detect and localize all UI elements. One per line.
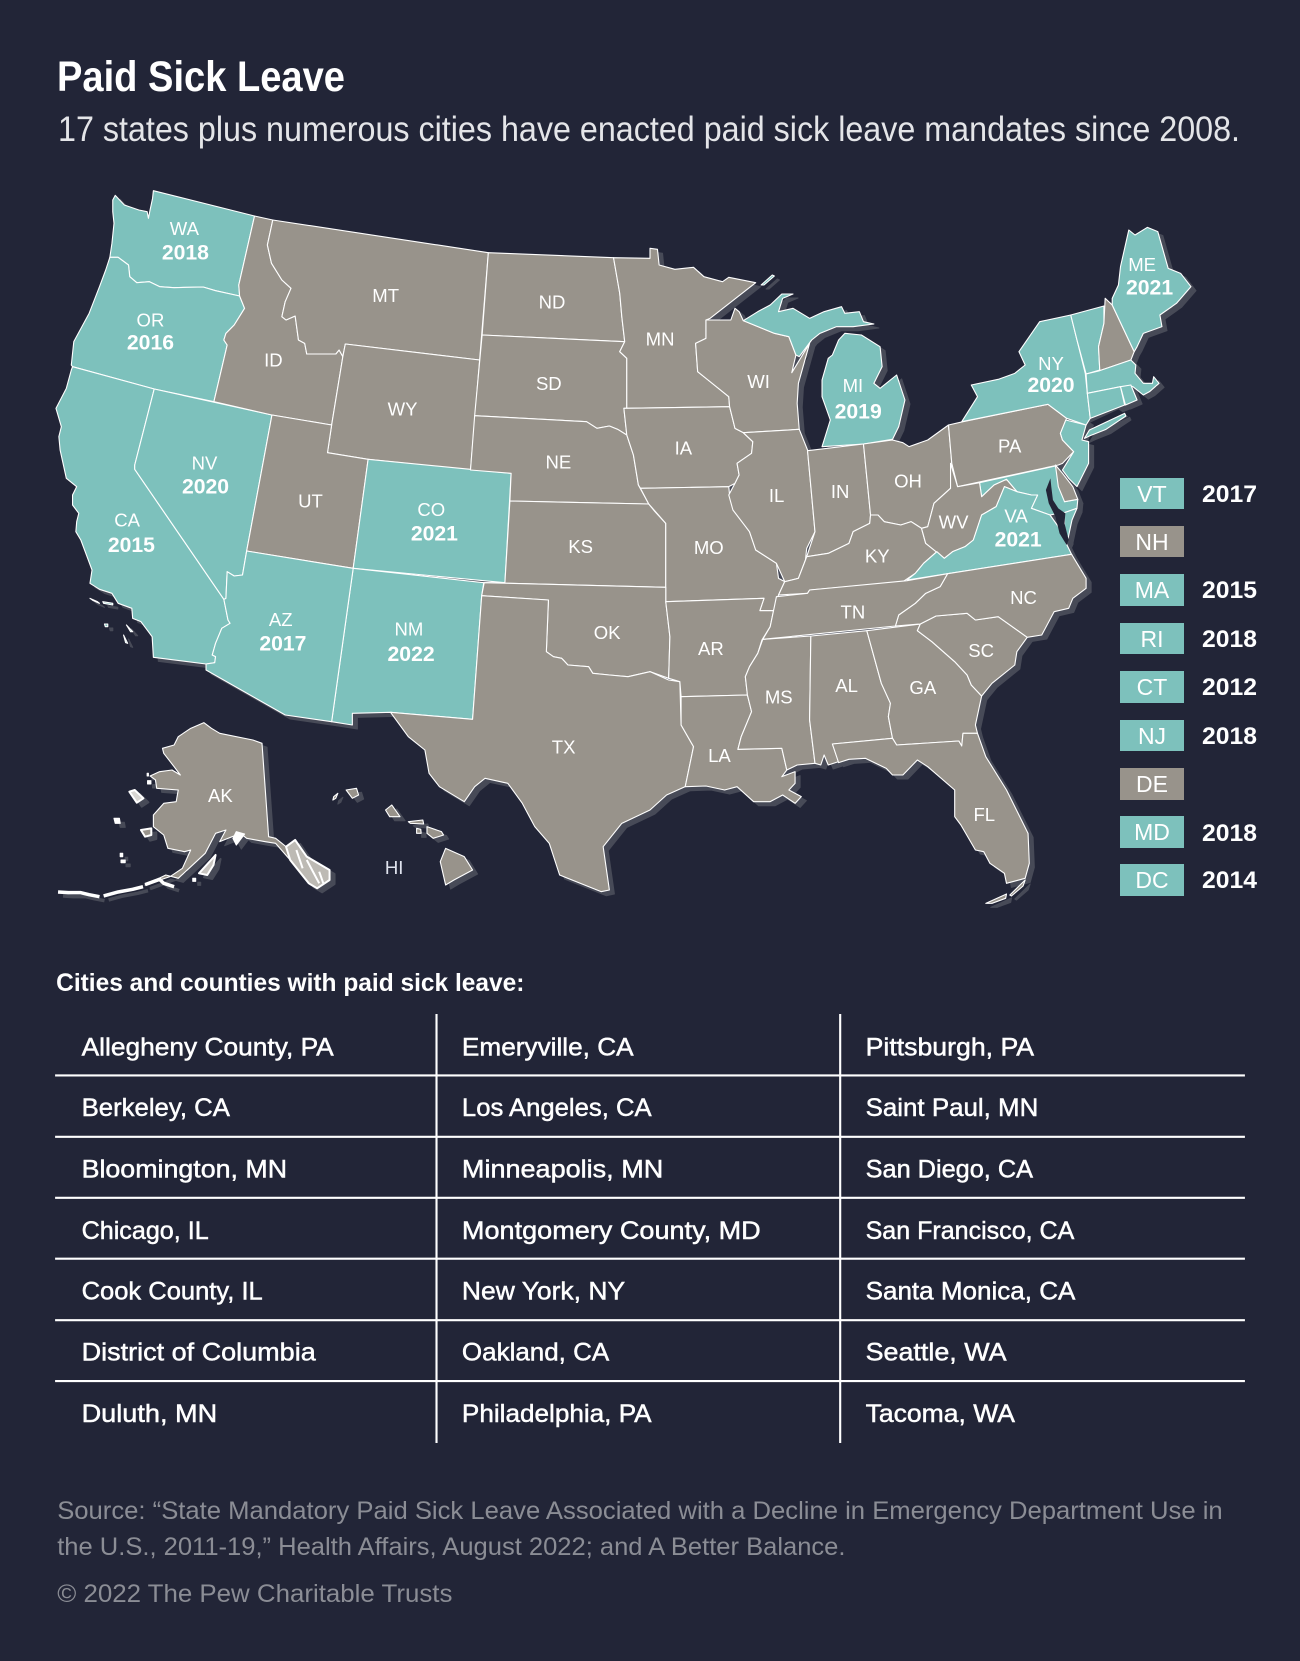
legend row: CT: 2012 (1202, 674, 1257, 701)
label: AZ: AZ (269, 609, 293, 630)
state: KY (779, 515, 937, 595)
state: NM (332, 568, 484, 725)
legend row: CT: CT (1137, 674, 1167, 700)
label: UT: UT (298, 491, 323, 512)
Alaska: small western islands (114, 773, 245, 881)
label: NM: NM (395, 619, 423, 640)
state: HI, Molokai (408, 820, 424, 824)
legend row: DC: DC (1135, 867, 1169, 893)
column 1 (82, 1034, 334, 1428)
state: MN (614, 248, 756, 408)
label: KS: KS (568, 536, 593, 557)
label: WY: WY (388, 398, 418, 419)
legend row: RI: 2018 (1202, 626, 1257, 653)
state: HI, Niihau and Kauai (333, 788, 359, 800)
legend: small northeastern states (1120, 478, 1258, 896)
state: MI lower peninsula (822, 333, 905, 447)
column 3: Saint Paul, MN (866, 1094, 1038, 1122)
state: WV (922, 463, 1017, 558)
legend row: RI (1120, 623, 1257, 654)
column 3: Pittsburgh, PA (866, 1034, 1034, 1062)
state: IN (807, 444, 871, 557)
column 1: Cook County, IL (82, 1277, 263, 1305)
state: CT (1087, 387, 1125, 418)
legend row: NJ: 2018 (1202, 723, 1257, 750)
year: CO: 2021 (411, 522, 458, 545)
column 2: Minneapolis, MN (462, 1155, 663, 1183)
state: NC (895, 554, 1086, 637)
label: NC: NC (1010, 587, 1037, 608)
legend row: DE: DE (1136, 771, 1168, 797)
state: OH (863, 425, 952, 528)
state: CA (56, 367, 230, 664)
legend row: VT (1120, 478, 1257, 509)
Long Island (1084, 413, 1126, 438)
state: NH (1099, 298, 1134, 371)
state: MT (267, 220, 488, 360)
state: KS (484, 501, 666, 587)
table of cities and counties (55, 1014, 1245, 1443)
state: FL (832, 733, 1029, 883)
Chesapeake Bay (1046, 478, 1069, 545)
state: NV (135, 389, 272, 599)
California Channel Islands (90, 598, 133, 643)
label: CO: CO (417, 499, 445, 520)
column 3 (866, 1034, 1075, 1428)
state: CO (353, 459, 511, 583)
column 3: Tacoma, WA (866, 1400, 1015, 1428)
year: MI: 2019 (835, 401, 882, 424)
legend row: MA: MA (1135, 577, 1170, 603)
legend row: MD (1120, 816, 1257, 848)
state: MS (738, 636, 815, 770)
cities section (55, 969, 1245, 1608)
column 2: Philadelphia, PA (462, 1400, 652, 1428)
state: NJ (1060, 420, 1089, 487)
source note: the U.S., 2011-19,” Health Affairs, August 2022; and A Better Balance. (57, 1533, 845, 1561)
label: PA: PA (998, 435, 1022, 456)
legend row: VT: 2017 (1202, 481, 1257, 508)
label: ND: ND (539, 291, 565, 312)
label: FL: FL (973, 804, 995, 825)
label: OH: OH (894, 470, 922, 491)
state: OR (71, 257, 245, 402)
label: IA: IA (675, 438, 693, 459)
label: NV: NV (192, 452, 218, 473)
year: OR: 2016 (127, 332, 174, 355)
legend row: DC (1120, 864, 1258, 896)
Florida Keys (986, 894, 1007, 903)
label: WI: WI (747, 371, 770, 392)
state: UT (247, 415, 368, 568)
label: IN: IN (831, 481, 849, 502)
column 1: Allegheny County, PA (82, 1034, 334, 1062)
state: TX (390, 596, 694, 892)
state: HI, Oahu (386, 805, 400, 817)
state: TN (763, 574, 948, 639)
column 1: Duluth, MN (82, 1400, 217, 1428)
label: LA: LA (708, 745, 731, 766)
state: HI, Big Island (440, 848, 473, 885)
label: MO: MO (694, 537, 724, 558)
state: SC (917, 613, 1027, 696)
state: ND (482, 253, 625, 342)
column 2: New York, NY (462, 1277, 625, 1305)
column 3: San Francisco, CA (866, 1217, 1074, 1245)
column 1: Bloomington, MN (82, 1155, 287, 1183)
source note: Source: “State Mandatory Paid Sick Leave Associated with a Decline in Emergency Department Use in (57, 1497, 1223, 1525)
label: SD: SD (536, 373, 562, 394)
column 2: Emeryville, CA (462, 1034, 634, 1062)
label: OK: OK (594, 622, 621, 643)
state: WA (110, 191, 255, 296)
column 1: Berkeley, CA (82, 1094, 230, 1122)
state: AL (810, 631, 893, 765)
copyright: © 2022 The Pew Charitable Trusts (57, 1580, 452, 1608)
label: WA: WA (170, 218, 200, 239)
column 1: District of Columbia (82, 1339, 317, 1367)
state: MD (980, 466, 1078, 515)
legend row: NH: NH (1135, 529, 1169, 555)
label: MN: MN (646, 328, 674, 349)
state: OK (482, 583, 670, 678)
year: AZ: 2017 (259, 633, 306, 656)
label: AL: AL (835, 675, 858, 696)
source note (57, 1497, 1223, 1561)
year: NV: 2020 (182, 476, 229, 499)
Alaska: Aleutian Islands (58, 879, 174, 897)
island: Isle Royale (761, 275, 774, 285)
state: ID (214, 216, 343, 425)
state: HI, Lanai (417, 828, 421, 833)
Alaska: Nunivak Island (141, 828, 151, 837)
label: MI: MI (843, 375, 863, 396)
legend row: DE (1120, 768, 1184, 800)
column 3: San Diego, CA (866, 1155, 1033, 1183)
state: IL (729, 429, 815, 582)
legend row: NH (1120, 526, 1184, 557)
year: WA: 2018 (162, 242, 209, 265)
state: NY (962, 315, 1090, 425)
state: MA (1086, 360, 1159, 395)
legend row: NJ (1120, 720, 1257, 751)
legend row: MA: 2015 (1202, 577, 1257, 604)
label: VA: VA (1004, 505, 1028, 526)
state: VT (1071, 306, 1104, 374)
state: VA (907, 487, 1072, 580)
column 3: Santa Monica, CA (866, 1277, 1075, 1305)
state: HI, Maui (427, 827, 444, 838)
legend row: CT (1120, 671, 1257, 703)
state: PA (948, 404, 1074, 487)
state: MI upper peninsula (743, 294, 874, 357)
state: ME (1112, 227, 1191, 352)
label: TN: TN (841, 602, 865, 623)
label: CA: CA (114, 510, 141, 531)
state: WY (327, 344, 480, 470)
label: MT: MT (372, 285, 399, 306)
column 1: Chicago, IL (82, 1217, 209, 1245)
cities heading: Cities and counties with paid sick leave: (56, 969, 524, 997)
label: SC: SC (968, 640, 994, 661)
year: CA: 2015 (108, 534, 155, 557)
label: NY: NY (1038, 353, 1064, 374)
column 2: Oakland, CA (462, 1339, 609, 1367)
Alaska: St. Lawrence Island (129, 790, 143, 803)
label: GA: GA (909, 677, 937, 698)
state: WI (696, 308, 810, 433)
state labels (108, 218, 1173, 878)
label: WV: WV (939, 512, 969, 533)
state: IA (624, 407, 753, 488)
year: VA: 2021 (995, 529, 1042, 552)
Alaska panhandle (286, 840, 330, 888)
legend row: MD: MD (1134, 819, 1170, 845)
title: Paid Sick Leave (57, 53, 345, 101)
year: NY: 2020 (1027, 374, 1075, 397)
state: SD (475, 335, 627, 435)
Virginia eastern shore (1065, 508, 1077, 539)
state: AZ (206, 551, 353, 722)
label: OR: OR (137, 309, 164, 330)
Florida Keys upper (1010, 880, 1025, 896)
legend row: MA (1120, 574, 1257, 606)
label: ID: ID (264, 350, 283, 371)
state: GA (867, 624, 982, 746)
legend row: NJ: NJ (1138, 723, 1166, 749)
label: ME: ME (1128, 254, 1156, 275)
legend row: MD: 2018 (1202, 820, 1257, 847)
label: MS: MS (765, 687, 793, 708)
label: KY: KY (865, 546, 890, 567)
state: NE (471, 416, 649, 504)
label: IL: IL (769, 485, 784, 506)
label: TX: TX (552, 736, 575, 757)
legend row: DC: 2014 (1202, 867, 1258, 894)
label: NE: NE (545, 451, 571, 472)
column 2: Montgomery County, MD (462, 1217, 761, 1245)
map of the United States (56, 191, 1191, 903)
state: DE (1055, 465, 1078, 502)
label: AR: AR (698, 638, 724, 659)
state: AK (145, 723, 315, 885)
legend row: VT: VT (1137, 481, 1167, 507)
state: AR (666, 598, 774, 697)
state: RI (1121, 385, 1137, 405)
label: AK: AK (208, 785, 233, 806)
state: MO (640, 487, 785, 611)
year: NM: 2022 (388, 643, 435, 666)
column 2 (462, 1034, 761, 1428)
Long Island Sound (1090, 409, 1123, 426)
label: HI: HI (385, 857, 403, 878)
column 3: Seattle, WA (866, 1339, 1007, 1367)
year: ME: 2021 (1126, 277, 1173, 300)
legend row: RI: RI (1140, 626, 1164, 652)
Alaska: Kodiak Island (199, 855, 216, 875)
column 2: Los Angeles, CA (462, 1094, 652, 1122)
state: LA (681, 695, 801, 803)
